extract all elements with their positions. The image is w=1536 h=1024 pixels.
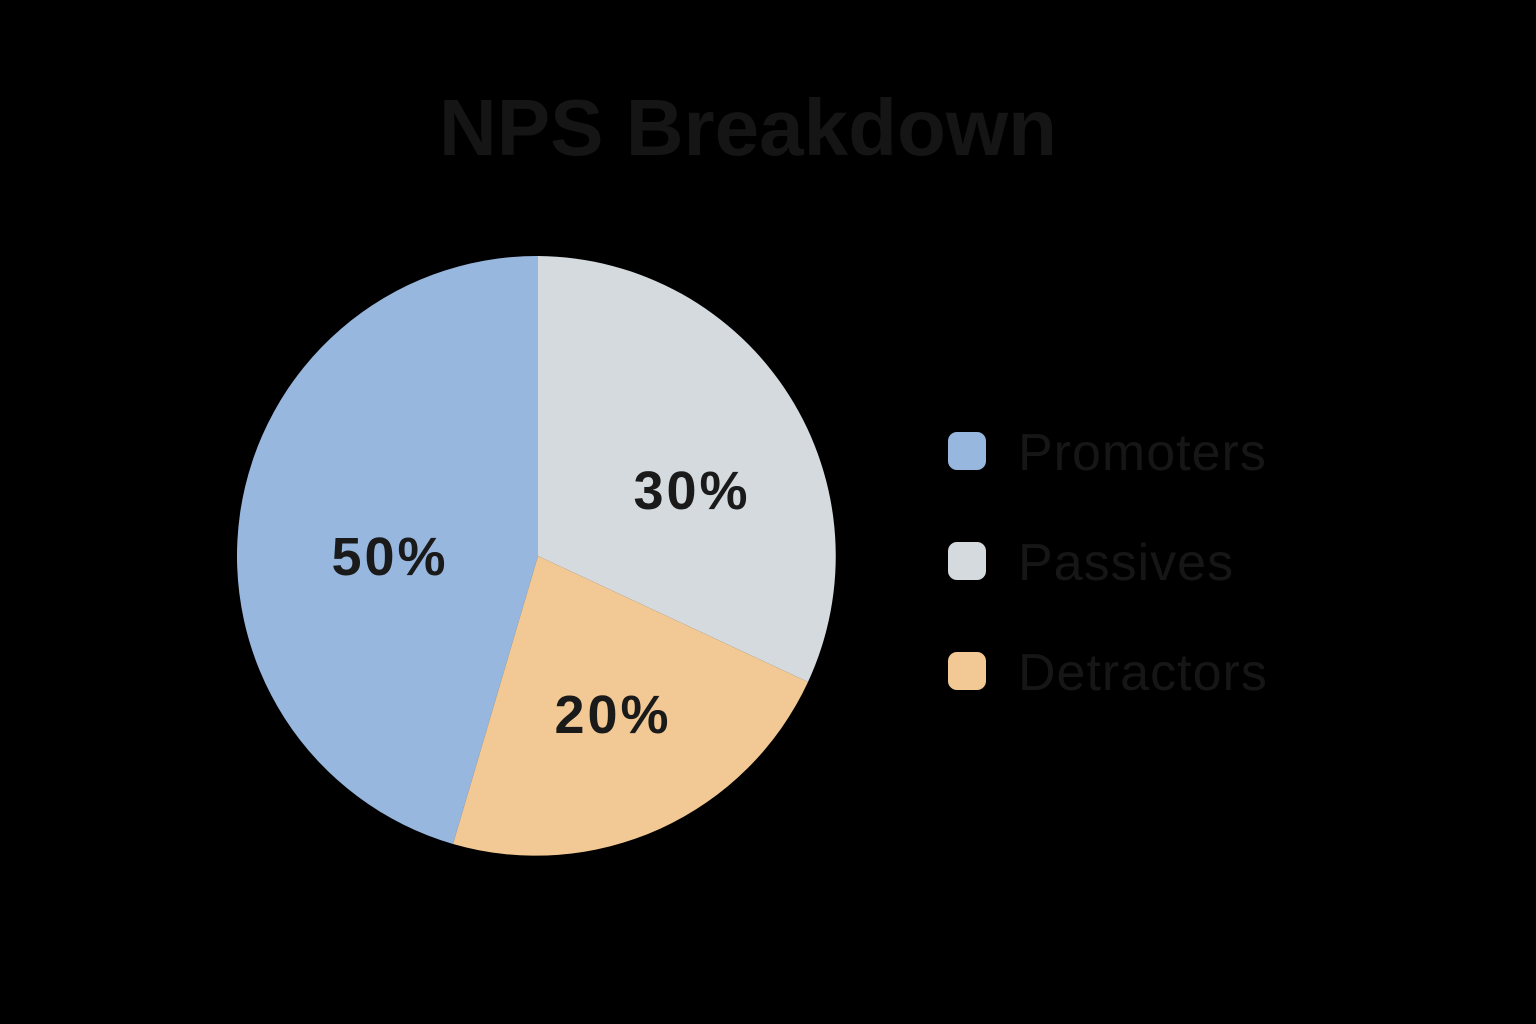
legend item: promoters: Promoters bbox=[1018, 424, 1267, 482]
legend item: passives: Passives bbox=[1018, 534, 1234, 592]
title: NPS Breakdown bbox=[439, 83, 1057, 172]
label 30%: 30% bbox=[633, 461, 751, 521]
legend item: detractors: Detractors bbox=[1018, 644, 1268, 702]
slice: promoters bbox=[237, 256, 538, 844]
slice: passives bbox=[538, 256, 836, 682]
label 50%: 50% bbox=[331, 527, 449, 587]
slice: detractors bbox=[453, 556, 808, 856]
label 20%: 20% bbox=[554, 685, 672, 745]
legend bbox=[948, 424, 1268, 702]
